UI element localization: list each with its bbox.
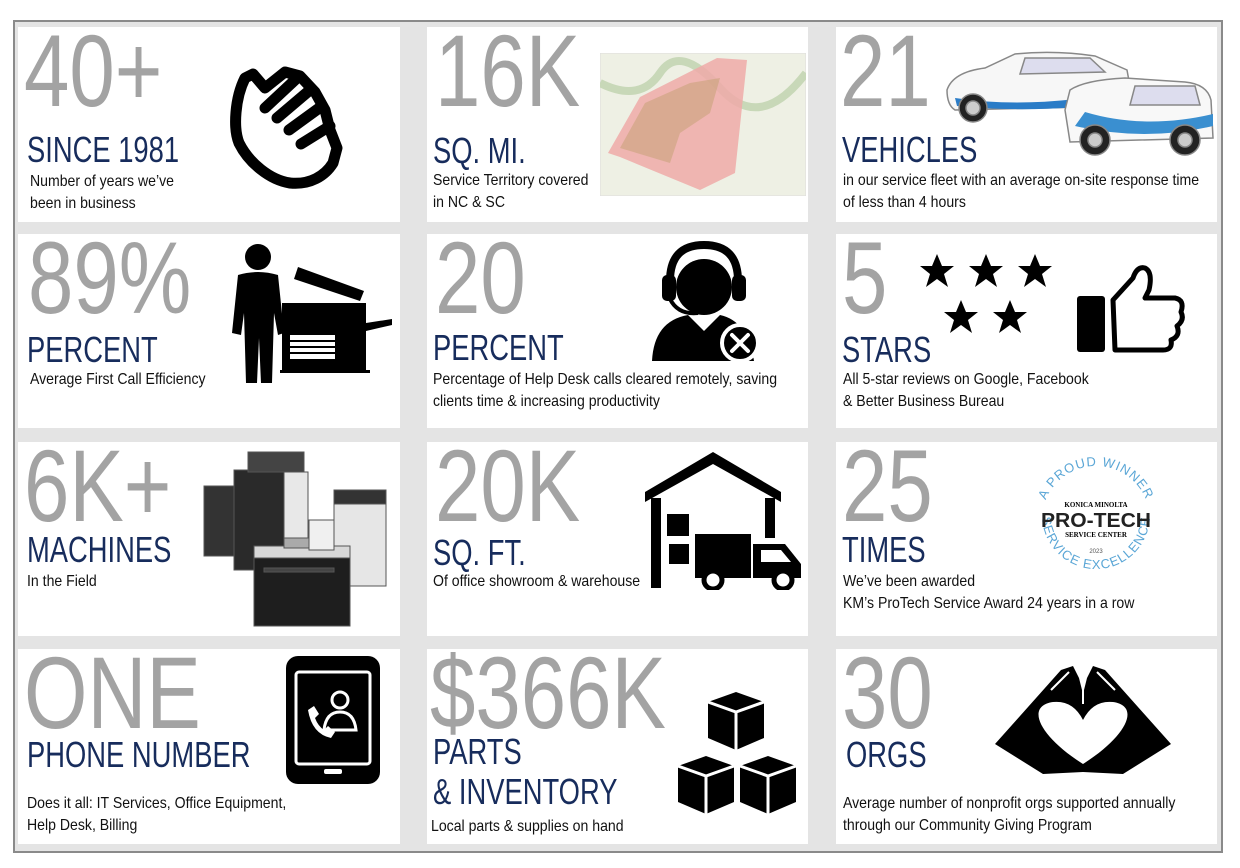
icon: pro-tech badge: SERVICE EXCELLENCE <box>1042 518 1150 569</box>
icon: warehouse truck <box>645 452 801 590</box>
desc phone: Help Desk, Billing <box>27 817 137 834</box>
icon: boxes <box>678 692 796 814</box>
desc orgs <box>843 795 1176 834</box>
desc vehicles <box>843 172 1199 211</box>
label ORGS: ORGS <box>846 734 927 775</box>
desc vehicles: of less than 4 hours <box>843 194 966 211</box>
panel: sq ft <box>427 442 808 636</box>
label PARTS & INVENTORY: & INVENTORY <box>433 771 617 812</box>
big number 5: 5 <box>842 221 887 335</box>
label TIMES: TIMES <box>842 529 926 570</box>
icon: vehicles <box>946 52 1214 156</box>
desc sq ft: Of office showroom & warehouse <box>433 573 640 590</box>
panel: vehicles <box>836 27 1217 222</box>
label SQ. FT.: SQ. FT. <box>433 532 526 573</box>
desc parts: Local parts & supplies on hand <box>431 818 624 835</box>
icon: thumbs up <box>1077 265 1185 352</box>
big number 30: 30 <box>842 636 933 750</box>
panel: help desk <box>427 234 808 428</box>
label SINCE 1981: SINCE 1981 <box>27 129 179 170</box>
label PARTS & INVENTORY <box>433 731 617 812</box>
desc first call: Average First Call Efficiency <box>30 371 206 388</box>
label PHONE NUMBER: PHONE NUMBER <box>27 734 250 775</box>
desc help desk: clients time & increasing productivity <box>433 393 660 410</box>
panel: phone <box>18 649 400 844</box>
desc territory <box>433 172 588 211</box>
label STARS: STARS <box>842 329 931 370</box>
desc territory: Service Territory covered <box>433 172 588 189</box>
icon: phone <box>286 656 380 784</box>
big number 6K+: 6K+ <box>24 429 171 543</box>
icon: pro-tech badge: A PROUD WINNER <box>1039 457 1153 500</box>
desc phone: Does it all: IT Services, Office Equipment, <box>27 795 286 812</box>
icon: pro-tech badge: SERVICE CENTER <box>1065 531 1128 539</box>
panel: years <box>18 27 400 222</box>
label MACHINES: MACHINES <box>27 529 171 570</box>
panel: parts <box>427 649 808 844</box>
desc stars <box>843 371 1089 410</box>
panel: first call <box>18 234 400 428</box>
desc years: been in business <box>30 195 136 212</box>
big number ONE: ONE <box>24 636 201 750</box>
big number 40+: 40+ <box>24 14 162 128</box>
icon: five stars <box>920 254 1052 333</box>
desc machines: In the Field <box>27 573 97 590</box>
big number 16K: 16K <box>435 14 580 128</box>
big number 21: 21 <box>840 14 931 128</box>
label PERCENT: PERCENT <box>27 329 158 370</box>
icon: pro-tech badge <box>1039 457 1153 569</box>
desc years: Number of years we’ve <box>30 173 174 190</box>
desc help desk <box>433 371 777 410</box>
icon: technician and printer <box>232 244 392 383</box>
desc help desk: Percentage of Help Desk calls cleared remotely, saving <box>433 371 777 388</box>
icon: pro-tech badge: PRO-TECH <box>1041 510 1151 532</box>
big number 20: 20 <box>435 221 526 335</box>
icon: pro-tech badge: 2023 <box>1089 549 1103 555</box>
desc award <box>843 573 1134 612</box>
desc vehicles: in our service fleet with an average on-site response time <box>843 172 1199 189</box>
icon: heart hands <box>995 666 1171 774</box>
desc stars: & Better Business Bureau <box>843 393 1004 410</box>
label PARTS & INVENTORY: PARTS <box>433 731 522 772</box>
desc phone <box>27 795 286 834</box>
map <box>600 53 806 196</box>
desc stars: All 5-star reviews on Google, Facebook <box>843 371 1089 388</box>
icon: hand <box>230 66 342 189</box>
panel: award <box>836 442 1217 636</box>
big number $366K: $366K <box>430 636 666 750</box>
desc territory: in NC & SC <box>433 194 505 211</box>
desc orgs: through our Community Giving Program <box>843 817 1092 834</box>
icon: pro-tech badge: KONICA MINOLTA <box>1064 501 1128 509</box>
panel: machines <box>18 442 400 636</box>
label VEHICLES: VEHICLES <box>842 129 977 170</box>
desc years <box>30 173 174 212</box>
big number 25: 25 <box>842 429 933 543</box>
desc orgs: Average number of nonprofit orgs supported annually <box>843 795 1175 812</box>
label SQ. MI.: SQ. MI. <box>433 130 526 171</box>
icon: headset agent <box>652 241 756 361</box>
panel: stars <box>836 234 1217 428</box>
panel: orgs <box>836 649 1217 844</box>
desc award: We’ve been awarded <box>843 573 975 590</box>
label PERCENT helpdesk: PERCENT <box>433 327 564 368</box>
desc award: KM’s ProTech Service Award 24 years in a row <box>843 595 1134 612</box>
icon: copier machines <box>204 452 386 626</box>
panel: territory <box>427 27 808 222</box>
big number 89%: 89% <box>28 221 191 335</box>
big number 20K: 20K <box>435 429 580 543</box>
